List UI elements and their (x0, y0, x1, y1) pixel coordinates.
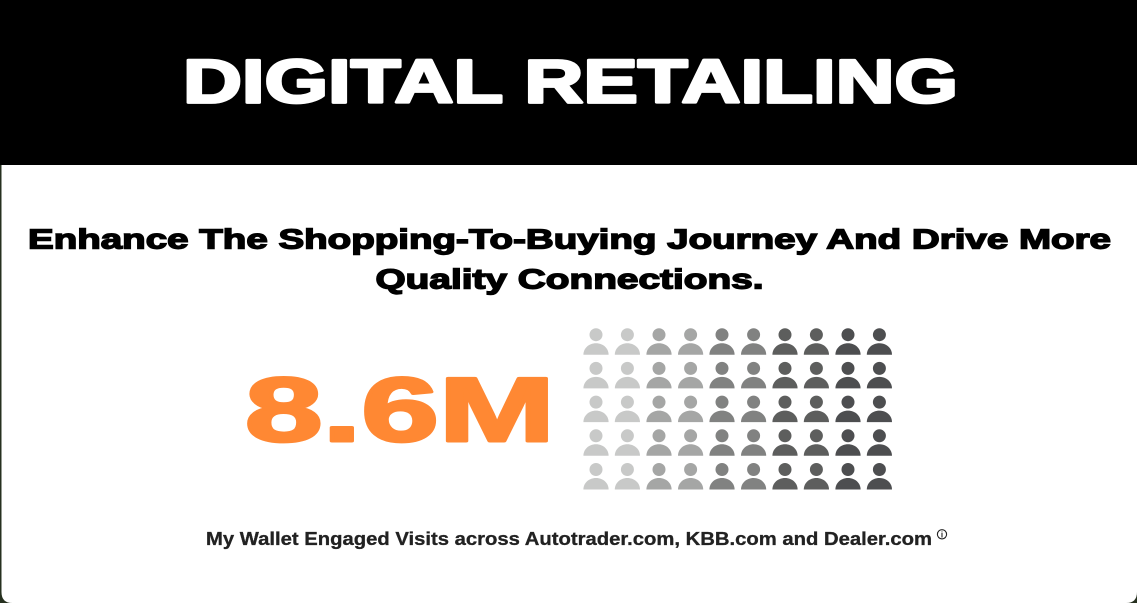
icon: info: i (941, 530, 943, 539)
heading: subtitle: Quality Connections. (376, 264, 764, 294)
title: DIGITAL RETAILING (183, 48, 958, 116)
panel: white content card (2, 160, 1137, 603)
heading: subtitle: Enhance The Shopping-To-Buying Journey And Drive More (28, 224, 1111, 254)
big number: 8.6M: 8.6M (245, 360, 555, 461)
heading: subtitle (28, 224, 1111, 294)
pictogram: 10 by 5 people grid (583, 328, 892, 490)
panel: black title banner (0, 0, 1137, 165)
caption: My Wallet Engaged Visits across Autotrader.com, KBB.com and Dealer.com (206, 529, 932, 549)
icon: info (937, 530, 947, 539)
